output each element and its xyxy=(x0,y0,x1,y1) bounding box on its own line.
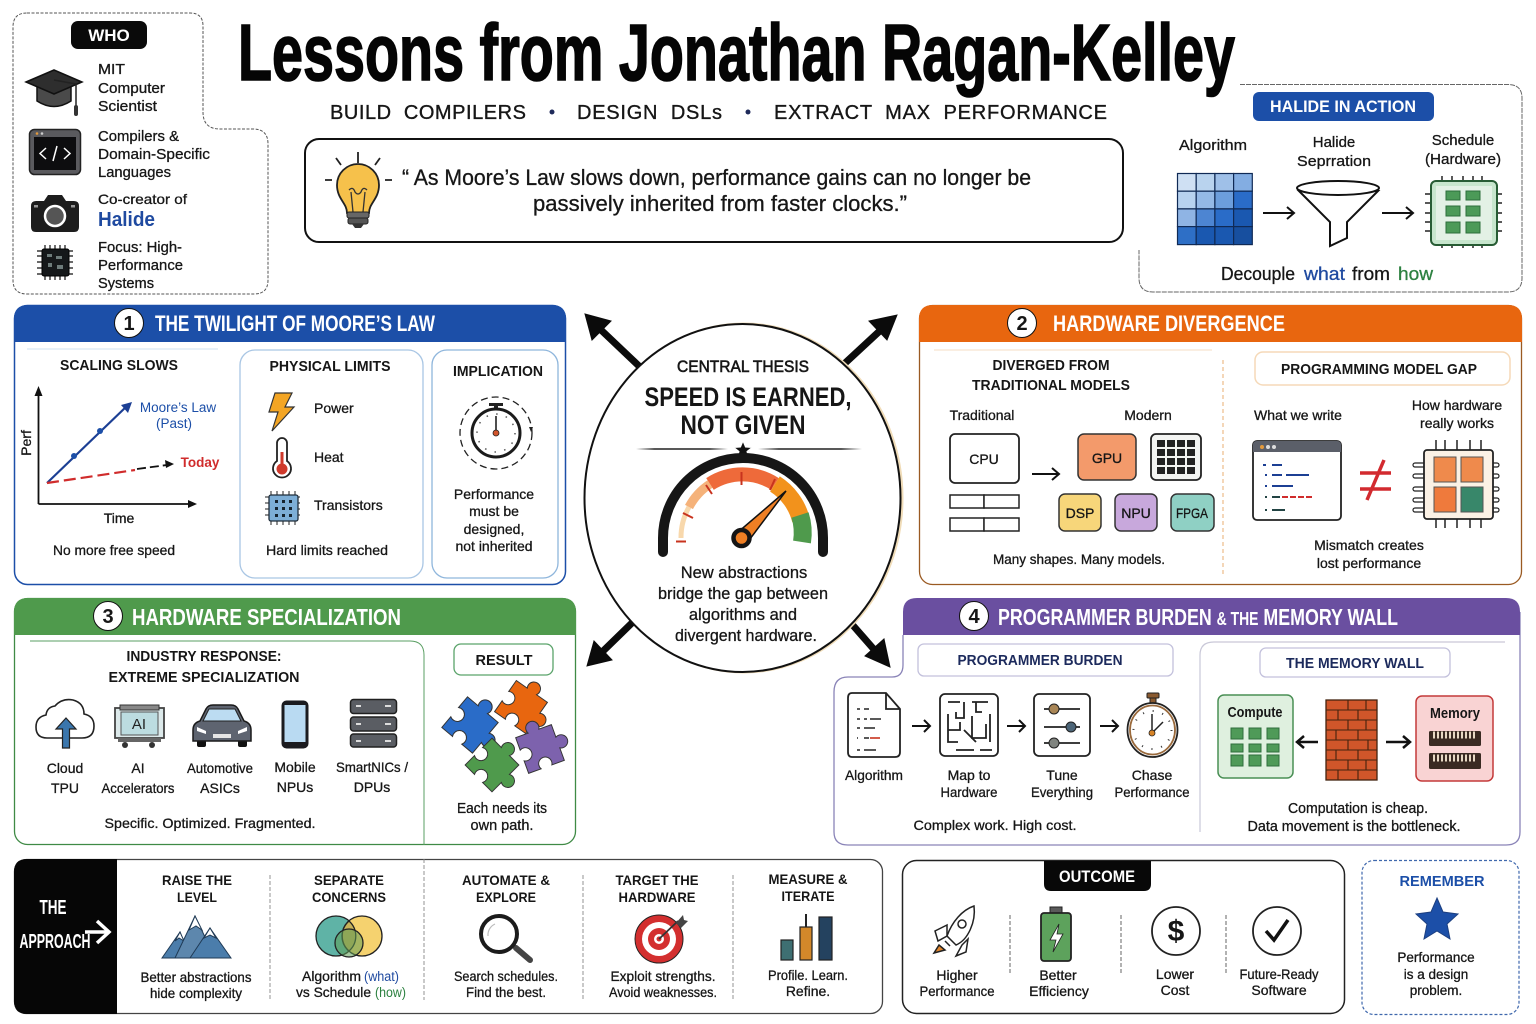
icon labels xyxy=(47,759,408,796)
icon: rocket xyxy=(934,906,974,956)
traditional CPU: CPU xyxy=(969,451,999,467)
icon labels: NPUs xyxy=(277,779,313,795)
heading: industry response xyxy=(108,649,300,686)
icon: funnel xyxy=(1297,181,1379,246)
box: physical limits xyxy=(240,350,423,578)
text: focus: Systems xyxy=(98,275,154,292)
labels xyxy=(950,407,1172,423)
arrow xyxy=(1386,736,1410,748)
caption: decouple: from xyxy=(1352,264,1390,284)
caption: computation: Data movement is the bottleneck. xyxy=(1248,819,1460,835)
step: target the hardware: Exploit strengths. xyxy=(610,968,716,984)
thesis text: divergent hardware. xyxy=(675,627,817,645)
box: physical limits: Heat xyxy=(314,449,344,465)
icon: up arrow xyxy=(56,718,76,748)
badge: who: WHO xyxy=(88,26,130,45)
step labels xyxy=(845,767,1190,800)
step: separate concerns: SEPARATE xyxy=(314,872,384,888)
text: co-creator of Halide xyxy=(98,191,187,231)
arrow xyxy=(912,720,930,732)
caption: mismatch: lost performance xyxy=(1317,555,1421,571)
quote text: “ As Moore’s Law slows down, performance gains can no longer be xyxy=(402,165,1031,190)
text: compilers and DSLs: Languages xyxy=(98,164,171,181)
panel: outcome: Performance xyxy=(920,983,995,999)
icon: maze xyxy=(940,694,998,756)
badge: outcome xyxy=(1044,861,1151,891)
panel 1: twilight of Moore's law xyxy=(14,305,566,584)
arrow xyxy=(1297,736,1318,748)
step: raise the level: hide complexity xyxy=(150,985,242,1001)
step: measure and iterate: MEASURE & xyxy=(768,871,848,887)
modern chips: NPU xyxy=(1121,505,1151,521)
text: co-creator of Halide: Halide xyxy=(98,209,155,231)
icon: magnifier xyxy=(481,916,530,960)
panel: outcome: Lower xyxy=(1156,966,1194,982)
quote text: passively inherited from faster clocks.” xyxy=(533,191,907,216)
caption: decouple xyxy=(1221,264,1434,284)
quote box xyxy=(305,139,1123,242)
thesis text: algorithms and xyxy=(689,606,797,624)
line chart: perf vs time: Moore’s Law xyxy=(140,400,216,415)
compute block: Compute xyxy=(1228,705,1282,721)
thesis title: SPEED IS EARNED, xyxy=(644,382,852,412)
icon labels: DPUs xyxy=(354,779,390,795)
panel 2: hardware divergence xyxy=(919,305,1522,584)
text: compilers and DSLs xyxy=(98,128,210,181)
text: compilers and DSLs: Compilers & xyxy=(98,128,179,145)
panel: remember xyxy=(1362,860,1519,1014)
step: separate concerns: CONCERNS xyxy=(312,889,386,905)
icon: algorithm doc xyxy=(848,693,900,757)
icon: mountains xyxy=(162,916,231,958)
subtitle xyxy=(330,102,1107,124)
step: measure and iterate: Profile. Learn. xyxy=(768,967,848,983)
icon: algorithm grid xyxy=(1178,174,1252,245)
icon labels: Automotive xyxy=(187,760,253,776)
line chart: perf vs time: Perf xyxy=(18,430,34,456)
arrow xyxy=(1032,468,1059,480)
panel: the approach xyxy=(14,859,882,1014)
left label: the approach: APPROACH xyxy=(20,931,90,953)
caption: computation: Computation is cheap. xyxy=(1288,801,1428,817)
step: raise the level: RAISE THE xyxy=(162,872,232,888)
icon: light bulb xyxy=(325,152,392,228)
caption: decouple: how xyxy=(1398,264,1434,284)
box: programming model gap: PROGRAMMING MODEL GAP xyxy=(1281,361,1477,378)
icon: AI board: AI xyxy=(132,716,146,733)
arrow xyxy=(1007,720,1025,732)
step labels: Everything xyxy=(1031,784,1093,800)
caption: specific: Specific. Optimized. Fragmented. xyxy=(104,815,316,831)
panel: halide in action xyxy=(1139,84,1522,292)
step: automate and explore: Search schedules. xyxy=(454,968,558,984)
panel: remember: REMEMBER xyxy=(1400,873,1485,890)
badge: halide in action: HALIDE IN ACTION xyxy=(1270,97,1416,116)
line chart: perf vs time: Time xyxy=(104,510,135,526)
caption: decouple: Decouple xyxy=(1221,264,1295,284)
subtitle: EXTRACT MAX PERFORMANCE xyxy=(774,102,1107,124)
box: physical limits: Transistors xyxy=(314,497,383,513)
thesis title xyxy=(644,382,852,440)
labels: Traditional xyxy=(950,407,1014,423)
caption: decouple: what xyxy=(1303,264,1345,284)
caption: mismatch: Mismatch creates xyxy=(1314,537,1424,553)
icon: brick wall xyxy=(1326,700,1377,780)
panel: outcome: Higher xyxy=(936,967,978,983)
icon: lightning xyxy=(269,393,294,431)
icon: check xyxy=(1253,907,1301,955)
icon: code window xyxy=(1253,441,1341,520)
labels: Modern xyxy=(1124,407,1172,423)
step: target the hardware: TARGET THE xyxy=(616,872,698,888)
icon labels: Cloud xyxy=(47,760,83,776)
panel: remember: is a design xyxy=(1404,967,1468,982)
icon: star divider xyxy=(734,441,752,458)
step: automate and explore xyxy=(454,872,558,1000)
icon: chip xyxy=(37,245,73,280)
subtitle: BUILD COMPILERS xyxy=(330,102,526,124)
labels: Halide xyxy=(1313,134,1355,151)
icon: star xyxy=(1416,898,1458,939)
compute block xyxy=(1218,695,1293,778)
heading: diverged: TRADITIONAL MODELS xyxy=(972,377,1130,394)
icon: chase stopwatch xyxy=(1128,693,1178,757)
heading: industry response: EXTREME SPECIALIZATION xyxy=(108,670,300,686)
modern chips: DSP xyxy=(1066,505,1094,521)
badge: memory wall: THE MEMORY WALL xyxy=(1286,656,1424,672)
panel: remember: Performance xyxy=(1397,950,1475,965)
thesis text: bridge the gap between xyxy=(658,585,828,603)
icon: graduation cap xyxy=(26,70,82,116)
step labels: Algorithm xyxy=(845,767,903,783)
icon labels: TPU xyxy=(51,780,79,796)
caption: computation xyxy=(1248,801,1460,835)
box: implication: IMPLICATION xyxy=(453,363,543,380)
icon labels: Mobile xyxy=(274,759,316,775)
box: physical limits: PHYSICAL LIMITS xyxy=(270,358,390,375)
text: MIT computer scientist: Computer xyxy=(98,80,165,97)
icon: sliders xyxy=(1034,694,1090,756)
caption: many shapes: Many shapes. Many models. xyxy=(993,551,1165,567)
arrows from central thesis xyxy=(585,314,897,667)
header bar: 2 xyxy=(1016,313,1028,335)
step: raise the level: Better abstractions xyxy=(140,969,252,985)
header bar: 3 xyxy=(102,606,114,628)
icon labels: ASICs xyxy=(200,780,240,796)
arrow xyxy=(1382,207,1413,219)
step: measure and iterate xyxy=(768,871,848,999)
box: programming model gap xyxy=(1255,352,1510,385)
badge: outcome: OUTCOME xyxy=(1059,867,1135,886)
quote text xyxy=(402,165,1031,216)
header bar xyxy=(919,305,1522,342)
step: target the hardware: Avoid weaknesses. xyxy=(609,984,717,1000)
icon: stopwatch xyxy=(460,397,533,469)
icon: dollar xyxy=(1152,907,1200,955)
caption: no more free speed: No more free speed xyxy=(53,542,175,558)
labels: (Hardware) xyxy=(1425,151,1501,168)
panel 4: programmer burden and memory wall xyxy=(834,598,1520,845)
step labels: Tune xyxy=(1046,767,1078,783)
box: implication: not inherited xyxy=(455,538,533,554)
thesis title: NOT GIVEN xyxy=(680,410,806,440)
subtitle: DESIGN DSLs xyxy=(577,102,722,124)
gauge xyxy=(663,458,823,552)
icon: server xyxy=(350,700,396,747)
step: separate concerns: Algorithm xyxy=(302,968,361,984)
line chart: perf vs time: (Past) xyxy=(156,416,192,431)
caption: each needs: Each needs its xyxy=(457,801,547,817)
labels xyxy=(1179,132,1501,170)
arrow xyxy=(1100,720,1118,732)
labels: Schedule xyxy=(1432,132,1494,149)
left label: the approach: THE xyxy=(40,897,66,919)
caption: mismatch xyxy=(1314,537,1424,571)
panel: who xyxy=(13,13,268,294)
header bar xyxy=(14,598,576,635)
icon: bar chart xyxy=(781,914,832,960)
box: physical limits: Power xyxy=(314,400,354,416)
header bar: PROGRAMMER BURDEN & THE MEMORY WALL xyxy=(998,604,1398,630)
text: compilers and DSLs: Domain-Specific xyxy=(98,146,210,163)
header bar xyxy=(14,305,566,342)
icon: thermometer xyxy=(273,438,291,477)
icon: code terminal xyxy=(30,130,80,174)
text: co-creator of Halide: Co-creator of xyxy=(98,191,187,207)
header bar xyxy=(903,598,1520,635)
panel: outcome: Future-Ready xyxy=(1240,966,1318,982)
step labels: Hardware xyxy=(940,784,998,800)
icon labels: AI xyxy=(131,760,145,776)
text: focus xyxy=(98,239,183,292)
step: raise the level xyxy=(140,872,252,1001)
line chart: perf vs time: Today xyxy=(181,455,220,470)
caption: each needs: own path. xyxy=(471,818,533,834)
header bar: THE TWILIGHT OF MOORE’S LAW xyxy=(155,311,435,336)
line chart: perf vs time xyxy=(18,386,220,526)
step: separate concerns: (what) xyxy=(364,969,399,984)
box: implication: designed, xyxy=(464,521,524,537)
box: implication: Performance xyxy=(454,486,534,502)
labels: What we write xyxy=(1254,407,1342,423)
memory block: Memory xyxy=(1430,706,1480,722)
central thesis circle xyxy=(584,324,902,672)
panel: outcome: Software xyxy=(1251,982,1307,998)
step: separate concerns: (how) xyxy=(375,985,406,1000)
labels: Algorithm xyxy=(1179,137,1247,154)
badge: result xyxy=(454,644,553,675)
header bar: HARDWARE DIVERGENCE xyxy=(1053,311,1285,336)
step labels: Map to xyxy=(948,767,991,783)
icon: venn xyxy=(316,916,382,957)
labels: Seprration xyxy=(1297,153,1371,170)
icon: not equal xyxy=(1360,460,1391,500)
header bar: 4 xyxy=(968,606,980,628)
icon: AI board xyxy=(115,705,164,748)
arrow xyxy=(1263,207,1294,219)
icon labels: Accelerators xyxy=(102,780,174,796)
step: automate and explore: AUTOMATE & xyxy=(462,872,550,888)
icon: transistor chip xyxy=(265,491,300,525)
step: target the hardware xyxy=(609,872,717,1000)
panel: outcome: Better xyxy=(1039,967,1077,983)
panel: outcome: Cost xyxy=(1161,982,1189,998)
panel 3: hardware specialization xyxy=(14,598,576,845)
badge: who xyxy=(71,21,147,49)
caption: each needs xyxy=(457,801,547,834)
panel: outcome: Efficiency xyxy=(1029,983,1089,999)
heading: diverged xyxy=(972,357,1130,394)
panel: remember: problem. xyxy=(1410,983,1462,998)
step labels: Chase xyxy=(1132,767,1172,783)
icon: cloud xyxy=(36,700,94,738)
step: automate and explore: EXPLORE xyxy=(476,889,536,905)
step: separate concerns: vs Schedule xyxy=(296,984,371,1000)
header bar: 1 xyxy=(123,313,135,335)
text: MIT computer scientist: MIT xyxy=(98,61,125,78)
left label: the approach xyxy=(14,859,117,1014)
caption: complex work: Complex work. High cost. xyxy=(914,817,1076,833)
box: implication xyxy=(432,350,558,578)
text: focus: Performance xyxy=(98,257,183,274)
panel: outcome xyxy=(902,860,1344,1014)
step: raise the level: LEVEL xyxy=(177,889,217,905)
header bar: HARDWARE SPECIALIZATION xyxy=(132,604,401,630)
traditional CPU xyxy=(950,434,1019,531)
badge: programmer burden xyxy=(918,644,1173,676)
icon labels: SmartNICs / xyxy=(336,759,408,775)
badge: halide in action xyxy=(1253,92,1434,121)
icon: battery xyxy=(1041,907,1071,961)
modern chips xyxy=(1059,434,1214,531)
icon: hardware chip xyxy=(1413,440,1499,528)
text: focus: Focus: High- xyxy=(98,239,182,256)
icon: phone xyxy=(282,700,308,748)
text: MIT computer scientist: Scientist xyxy=(98,98,158,115)
thesis text: New abstractions xyxy=(681,564,807,582)
labels: How hardware xyxy=(1412,397,1502,413)
heading: central thesis: CENTRAL THESIS xyxy=(677,357,809,376)
step: measure and iterate: Refine. xyxy=(786,983,830,999)
icon: puzzle xyxy=(442,672,574,799)
heading: scaling slows: SCALING SLOWS xyxy=(60,357,178,374)
step: measure and iterate: ITERATE xyxy=(782,888,834,904)
box: physical limits: Hard limits reached xyxy=(266,542,388,558)
heading: diverged: DIVERGED FROM xyxy=(992,357,1110,374)
icon: green chip xyxy=(1425,176,1502,248)
icon: camera xyxy=(31,195,79,232)
text: MIT computer scientist xyxy=(98,61,165,115)
box: implication: must be xyxy=(469,503,519,519)
badge: result: RESULT xyxy=(476,653,533,669)
icon: target xyxy=(635,915,688,963)
step: target the hardware: HARDWARE xyxy=(618,889,696,905)
step: separate concerns xyxy=(296,872,406,1000)
labels xyxy=(1254,397,1502,431)
thesis text xyxy=(658,564,828,645)
step labels: Performance xyxy=(1114,784,1190,800)
modern chips: GPU xyxy=(1092,450,1122,466)
memory block xyxy=(1416,696,1493,781)
badge: memory wall xyxy=(1260,648,1450,677)
modern chips: FPGA xyxy=(1176,505,1209,521)
badge: programmer burden: PROGRAMMER BURDEN xyxy=(958,653,1122,669)
icon: car xyxy=(193,705,251,747)
step: automate and explore: Find the best. xyxy=(466,984,546,1000)
icon: dollar: $ xyxy=(1168,915,1185,948)
heading: industry response: INDUSTRY RESPONSE: xyxy=(126,649,282,665)
labels: really works xyxy=(1420,415,1494,431)
